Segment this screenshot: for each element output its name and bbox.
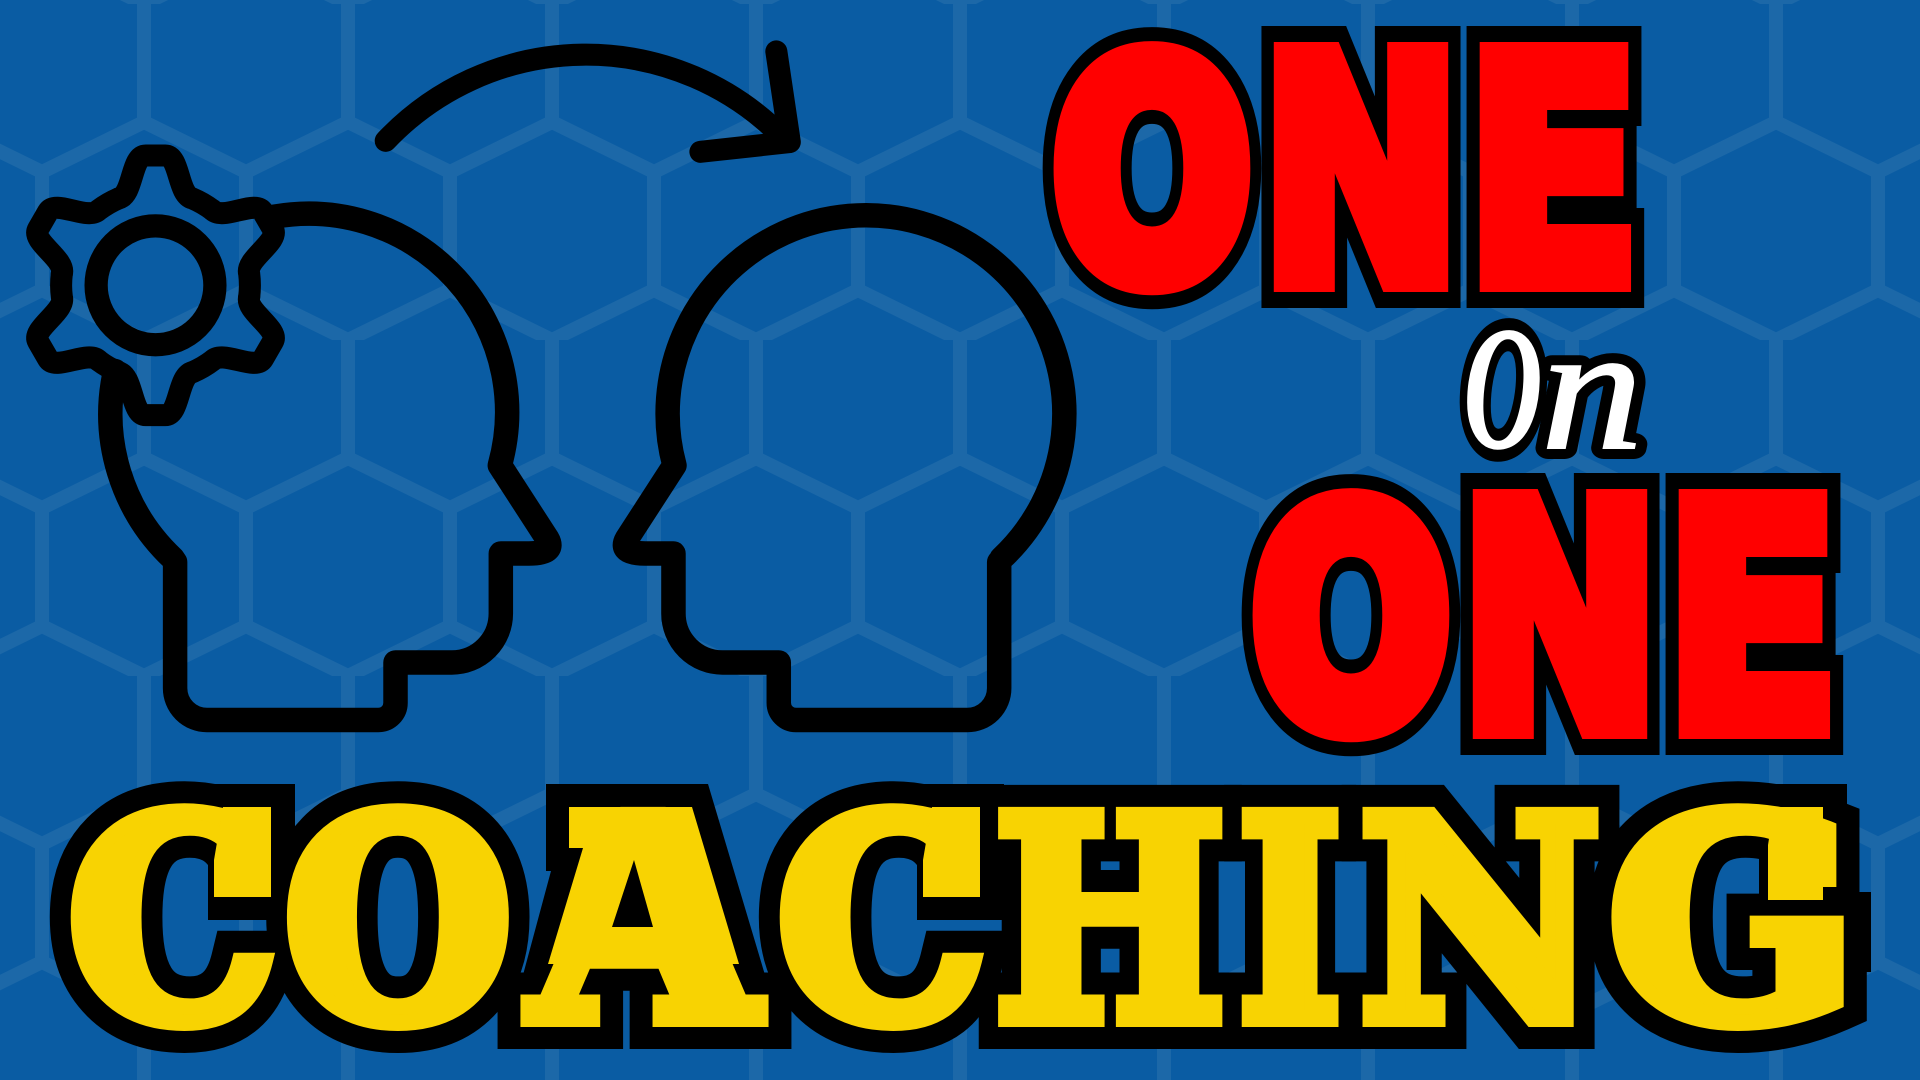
heading: COACHING: C	[67, 758, 279, 1080]
heading: COACHING: G	[1607, 756, 1859, 1080]
heading: COACHING: C	[776, 758, 988, 1080]
heading: On (script): n	[1541, 290, 1643, 487]
heading: ONE (top): E	[1466, 0, 1640, 353]
heading: COACHING: H	[994, 757, 1226, 1080]
heading: COACHING: G	[1607, 756, 1859, 1080]
heading: ONE (bottom): N	[1460, 440, 1660, 801]
heading: ONE (bottom): O	[1252, 447, 1450, 795]
icon: two heads with gear and arrow	[15, 51, 1064, 720]
heading: ONE (bottom): E	[1665, 439, 1839, 800]
heading: COACHING: I	[1238, 756, 1342, 1080]
heading: On (script): O	[1463, 291, 1543, 488]
heading: COACHING: N	[1358, 758, 1602, 1080]
heading: COACHING: C	[776, 758, 988, 1080]
heading: ONE (bottom): N	[1460, 440, 1660, 801]
icon: gear	[15, 156, 296, 415]
heading: ONE (bottom): E	[1665, 439, 1839, 800]
icon: left head	[110, 214, 549, 720]
heading: ONE (top)	[1053, 0, 1640, 354]
arrow: curved from left head to right head	[386, 51, 790, 152]
heading: On (script)	[1463, 290, 1643, 488]
heading: COACHING: O	[283, 757, 513, 1080]
heading: ONE (bottom)	[1252, 439, 1839, 801]
heading: COACHING: I	[1238, 756, 1342, 1080]
heading: COACHING: A	[526, 757, 763, 1080]
heading: COACHING: A	[526, 757, 763, 1080]
heading: ONE (top): E	[1466, 0, 1640, 353]
heading: COACHING: C	[67, 758, 279, 1080]
heading: On (script): O	[1463, 291, 1543, 488]
heading: ONE (top): N	[1261, 0, 1461, 354]
heading: ONE (top): N	[1261, 0, 1461, 354]
icon: right head	[625, 215, 1064, 720]
heading: COACHING	[67, 756, 1871, 1080]
heading: COACHING: N	[1358, 758, 1602, 1080]
heading: ONE (bottom): O	[1252, 447, 1450, 795]
heading: COACHING: O	[283, 757, 513, 1080]
heading: ONE (top): O	[1053, 0, 1251, 348]
heading: ONE (top): O	[1053, 0, 1251, 348]
heading: COACHING: H	[994, 757, 1226, 1080]
heading: On (script): n	[1541, 290, 1643, 487]
